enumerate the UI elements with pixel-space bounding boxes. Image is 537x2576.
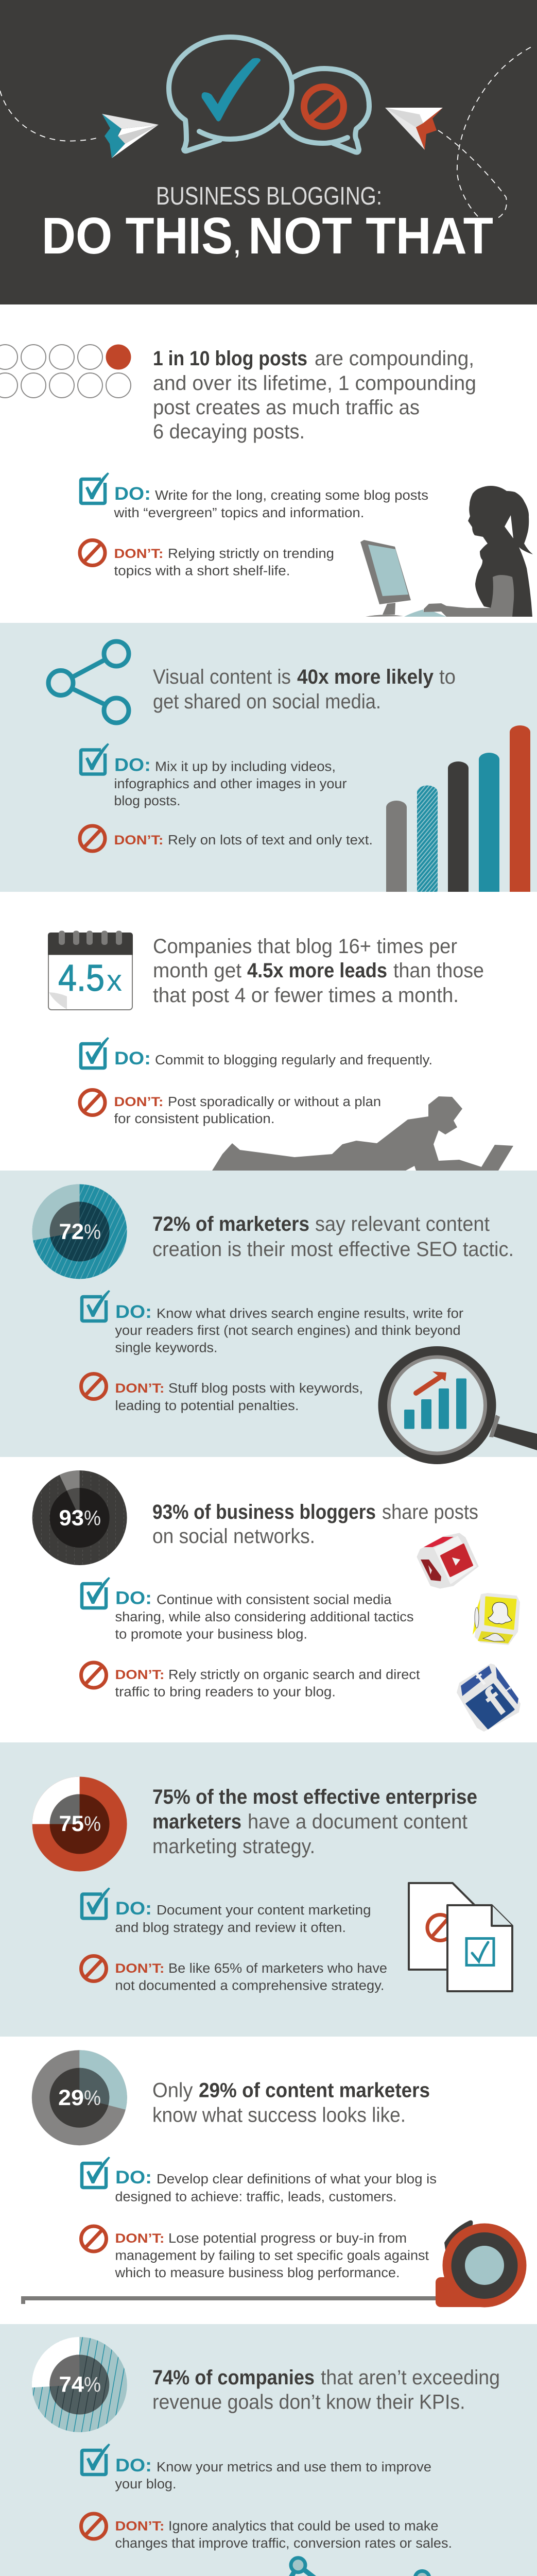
- headline: Visual content is: [153, 666, 291, 688]
- do item: Commit to blogging regularly and frequently.: [155, 1053, 432, 1067]
- icon: share: [48, 641, 129, 723]
- headline: than those: [393, 959, 484, 982]
- headline: 74% of companies: [152, 2366, 315, 2389]
- don't item: [81, 2514, 452, 2551]
- panel: 29 percent of content marketers: [0, 2037, 537, 2324]
- icon: no sign: [81, 2514, 106, 2539]
- headline: [153, 666, 456, 713]
- headline: [152, 2366, 500, 2413]
- donut chart: 72%: %: [84, 1220, 101, 1244]
- do item: [81, 472, 428, 520]
- icon: check box: [82, 2444, 110, 2475]
- do item: Mix it up by including videos,: [155, 759, 336, 774]
- don't item: [81, 2226, 429, 2280]
- headline: say relevant content: [315, 1213, 490, 1235]
- title: NOT THAT: [248, 207, 493, 265]
- don't item: [81, 1956, 387, 1993]
- don't item: not documented a comprehensive strategy.: [115, 1978, 384, 1993]
- do item: infographics and other images in your: [114, 777, 347, 791]
- icon: teal paper plane: [102, 114, 159, 158]
- illustration: tape measure: [21, 2221, 526, 2307]
- donut chart: 29%: %: [84, 2086, 101, 2110]
- headline: Only: [152, 2079, 193, 2102]
- don't item: Ignore analytics that could be used to make: [168, 2519, 439, 2534]
- panel: 93 percent of business bloggers: [0, 1457, 537, 1742]
- icon: check mark: [202, 58, 261, 122]
- donut chart: 75%: 75: [59, 1811, 84, 1836]
- donut chart: 72%: 72: [59, 1219, 84, 1244]
- icon: facebook cube: f: [504, 1685, 513, 1693]
- dashed flight path: right: [438, 46, 532, 218]
- icon: calendar: [48, 930, 133, 1010]
- do item: [82, 2444, 431, 2492]
- headline: have a document content: [248, 1810, 467, 1833]
- don't item: DON’T:: [114, 833, 164, 848]
- do item: DO:: [114, 755, 151, 775]
- icon: no sign: [80, 1090, 105, 1115]
- headline: 72% of marketers: [152, 1213, 309, 1235]
- do item: [81, 1037, 432, 1069]
- don't item: DON’T:: [115, 2231, 165, 2246]
- do item: [81, 743, 347, 808]
- headline: [152, 1213, 514, 1261]
- illustration: magnifying glass with growth chart: [378, 1346, 537, 1464]
- icon: snapchat cube: [473, 1594, 519, 1645]
- headline: 75% of the most effective enterprise: [152, 1786, 477, 1808]
- headline: share posts: [382, 1501, 478, 1523]
- icon: documents: [409, 1883, 512, 1991]
- don't item: Post sporadically or without a plan: [168, 1095, 381, 1109]
- panel: blog frequency: [0, 892, 537, 1171]
- icon: check box: [81, 1037, 109, 1068]
- headline: that post 4 or fewer times a month.: [153, 984, 459, 1007]
- do item: Write for the long, creating some blog posts: [155, 488, 428, 503]
- don't item: DON’T:: [114, 1095, 164, 1109]
- icon: ten post circles: [0, 344, 131, 398]
- title: [42, 207, 493, 265]
- donut chart: 93%: [32, 1470, 127, 1565]
- subtitle: BUSINESS BLOGGING:: [156, 182, 382, 210]
- do item: your blog.: [115, 2477, 176, 2492]
- don't item: DON’T:: [115, 1961, 165, 1976]
- don't item: DON’T:: [115, 1668, 165, 1682]
- don't item: [80, 540, 334, 578]
- do item: DO:: [114, 1048, 151, 1069]
- do item: your readers first (not search engines) and think beyond: [115, 1324, 460, 1338]
- don't item: Be like 65% of marketers who have: [168, 1961, 387, 1976]
- icon: facebook cube: f: [476, 1680, 514, 1724]
- icon: check box: [82, 2157, 110, 2188]
- headline: Companies that blog 16+ times per: [153, 935, 457, 958]
- donut chart: 75%: [32, 1776, 127, 1871]
- icon: check box: [82, 1290, 110, 1321]
- icon: check box: [82, 1888, 110, 1919]
- do item: with “evergreen” topics and information.: [113, 506, 365, 520]
- panel: 75 percent of enterprise marketers: [0, 1742, 537, 2037]
- do item: DO:: [115, 2455, 152, 2476]
- icon: check box: [82, 1577, 110, 1608]
- headline: 4.5x more leads: [247, 959, 387, 982]
- headline: revenue goals don’t know their KPIs.: [152, 2391, 465, 2413]
- icon: facebook cube: f: [471, 1668, 491, 1690]
- panel: 72 percent of marketers: [0, 1171, 537, 1464]
- title: ,: [233, 226, 241, 260]
- don't item: Lose potential progress or buy-in from: [168, 2231, 407, 2246]
- panel: visual content: [0, 623, 537, 892]
- headline: creation is their most effective SEO tactic.: [152, 1238, 514, 1261]
- icon: small speech bubble: [282, 69, 369, 152]
- title: DO THIS: [42, 207, 233, 265]
- don't item: Stuff blog posts with keywords,: [168, 1381, 363, 1396]
- donut chart: 74%: [32, 2337, 127, 2432]
- headline: 29% of content marketers: [199, 2079, 430, 2102]
- don't item: DON’T:: [114, 547, 164, 561]
- icon: check box: [81, 743, 109, 774]
- headline: 6 decaying posts.: [153, 420, 305, 443]
- headline: [152, 1501, 478, 1548]
- do item: [82, 1888, 371, 1935]
- headline: 1 in 10 blog posts: [153, 347, 307, 370]
- headline: [152, 1786, 477, 1858]
- headline: post creates as much traffic as: [153, 396, 420, 419]
- icon: large speech bubble: [169, 37, 292, 151]
- donut chart: 74%: 74: [59, 2372, 84, 2397]
- dashed flight path: left: [0, 91, 100, 141]
- icon: facebook cube: [457, 1664, 520, 1731]
- panel: 74 percent of companies: [0, 2324, 537, 2576]
- bar chart: [386, 725, 530, 892]
- illustration: man lying with laptop: [212, 1096, 513, 1171]
- don't item: [80, 826, 373, 851]
- headline: 40x more likely: [297, 666, 434, 688]
- icon: check box: [81, 472, 109, 503]
- do item: Know what drives search engine results, write for: [157, 1307, 464, 1321]
- do item: and blog strategy and review it often.: [115, 1921, 346, 1935]
- don't item: DON’T:: [115, 2519, 165, 2534]
- icon: no sign: [80, 540, 105, 566]
- don't item: Rely strictly on organic search and direct: [168, 1668, 420, 1682]
- icon: no sign: [81, 2226, 106, 2251]
- headline: and over its lifetime, 1 compounding: [153, 372, 476, 395]
- don't item: leading to potential penalties.: [115, 1399, 299, 1413]
- do item: [82, 1577, 414, 1641]
- do item: Document your content marketing: [157, 1903, 371, 1918]
- icon: calendar: x: [107, 964, 122, 997]
- headline: to: [439, 666, 456, 688]
- headline: are compounding,: [315, 347, 474, 370]
- do item: [82, 2157, 437, 2204]
- don't item: management by failing to set specific goals against: [115, 2248, 429, 2263]
- donut chart: 72%: [32, 1184, 127, 1279]
- donut chart: 74%: %: [84, 2373, 101, 2397]
- headline: month get: [153, 959, 241, 982]
- headline: marketers: [152, 1810, 241, 1833]
- do item: Continue with consistent social media: [157, 1593, 392, 1607]
- icon: no sign: [81, 1663, 106, 1688]
- icon: no sign: [80, 826, 105, 851]
- icon: calendar: 4.5: [58, 958, 105, 999]
- don't item: which to measure business blog performance.: [114, 2266, 400, 2280]
- don't item: Relying strictly on trending: [168, 547, 334, 561]
- don't item: Rely on lots of text and only text.: [168, 833, 373, 848]
- headline: [153, 935, 484, 1007]
- headline: get shared on social media.: [153, 690, 381, 713]
- headline: 93% of business bloggers: [152, 1501, 376, 1523]
- do item: sharing, while also considering additional tactics: [115, 1610, 414, 1624]
- donut chart: 29%: [32, 2050, 127, 2145]
- don't item: traffic to bring readers to your blog.: [115, 1685, 336, 1699]
- don't item: topics with a short shelf-life.: [114, 564, 290, 578]
- headline: know what success looks like.: [152, 2104, 406, 2127]
- headline: marketing strategy.: [152, 1835, 315, 1858]
- icon: youtube cube: [418, 1534, 478, 1588]
- icon: red paper plane: [385, 108, 443, 150]
- icon: no sign: [81, 1956, 106, 1981]
- do item: Know your metrics and use them to improve: [157, 2460, 431, 2475]
- do item: to promote your business blog.: [115, 1627, 307, 1641]
- headline: on social networks.: [152, 1525, 315, 1548]
- do item: DO:: [115, 1899, 152, 1919]
- panel: 1 in 10 blog posts: [0, 304, 537, 623]
- don't item: [80, 1090, 381, 1126]
- headline: [152, 2079, 430, 2127]
- do item: designed to achieve: traffic, leads, customers.: [115, 2190, 396, 2204]
- do item: blog posts.: [114, 794, 180, 808]
- don't item: [81, 1663, 420, 1699]
- icon: no sign: [304, 87, 344, 127]
- illustration: woman at computer: [360, 486, 533, 617]
- do item: DO:: [115, 1588, 152, 1608]
- headline: that aren’t exceeding: [321, 2366, 500, 2389]
- donut chart: 93%: 93: [59, 1505, 84, 1530]
- line chart: [0, 2558, 537, 2576]
- don't item: [81, 1374, 363, 1413]
- icon: no sign: [81, 1374, 106, 1399]
- donut chart: 75%: %: [84, 1812, 101, 1836]
- do item: Develop clear definitions of what your blog is: [157, 2172, 437, 2187]
- don't item: for consistent publication.: [114, 1112, 275, 1126]
- do item: [82, 1290, 464, 1355]
- do item: single keywords.: [115, 1341, 217, 1355]
- donut chart: 29%: 29: [58, 2086, 84, 2110]
- panel: header: [0, 0, 537, 304]
- don't item: DON’T:: [115, 1381, 165, 1396]
- do item: DO:: [115, 2167, 152, 2188]
- don't item: changes that improve traffic, conversion rates or sales.: [115, 2536, 452, 2551]
- do item: DO:: [115, 1302, 152, 1322]
- headline: [153, 347, 476, 443]
- donut chart: 93%: %: [84, 1506, 101, 1530]
- do item: DO:: [114, 484, 151, 504]
